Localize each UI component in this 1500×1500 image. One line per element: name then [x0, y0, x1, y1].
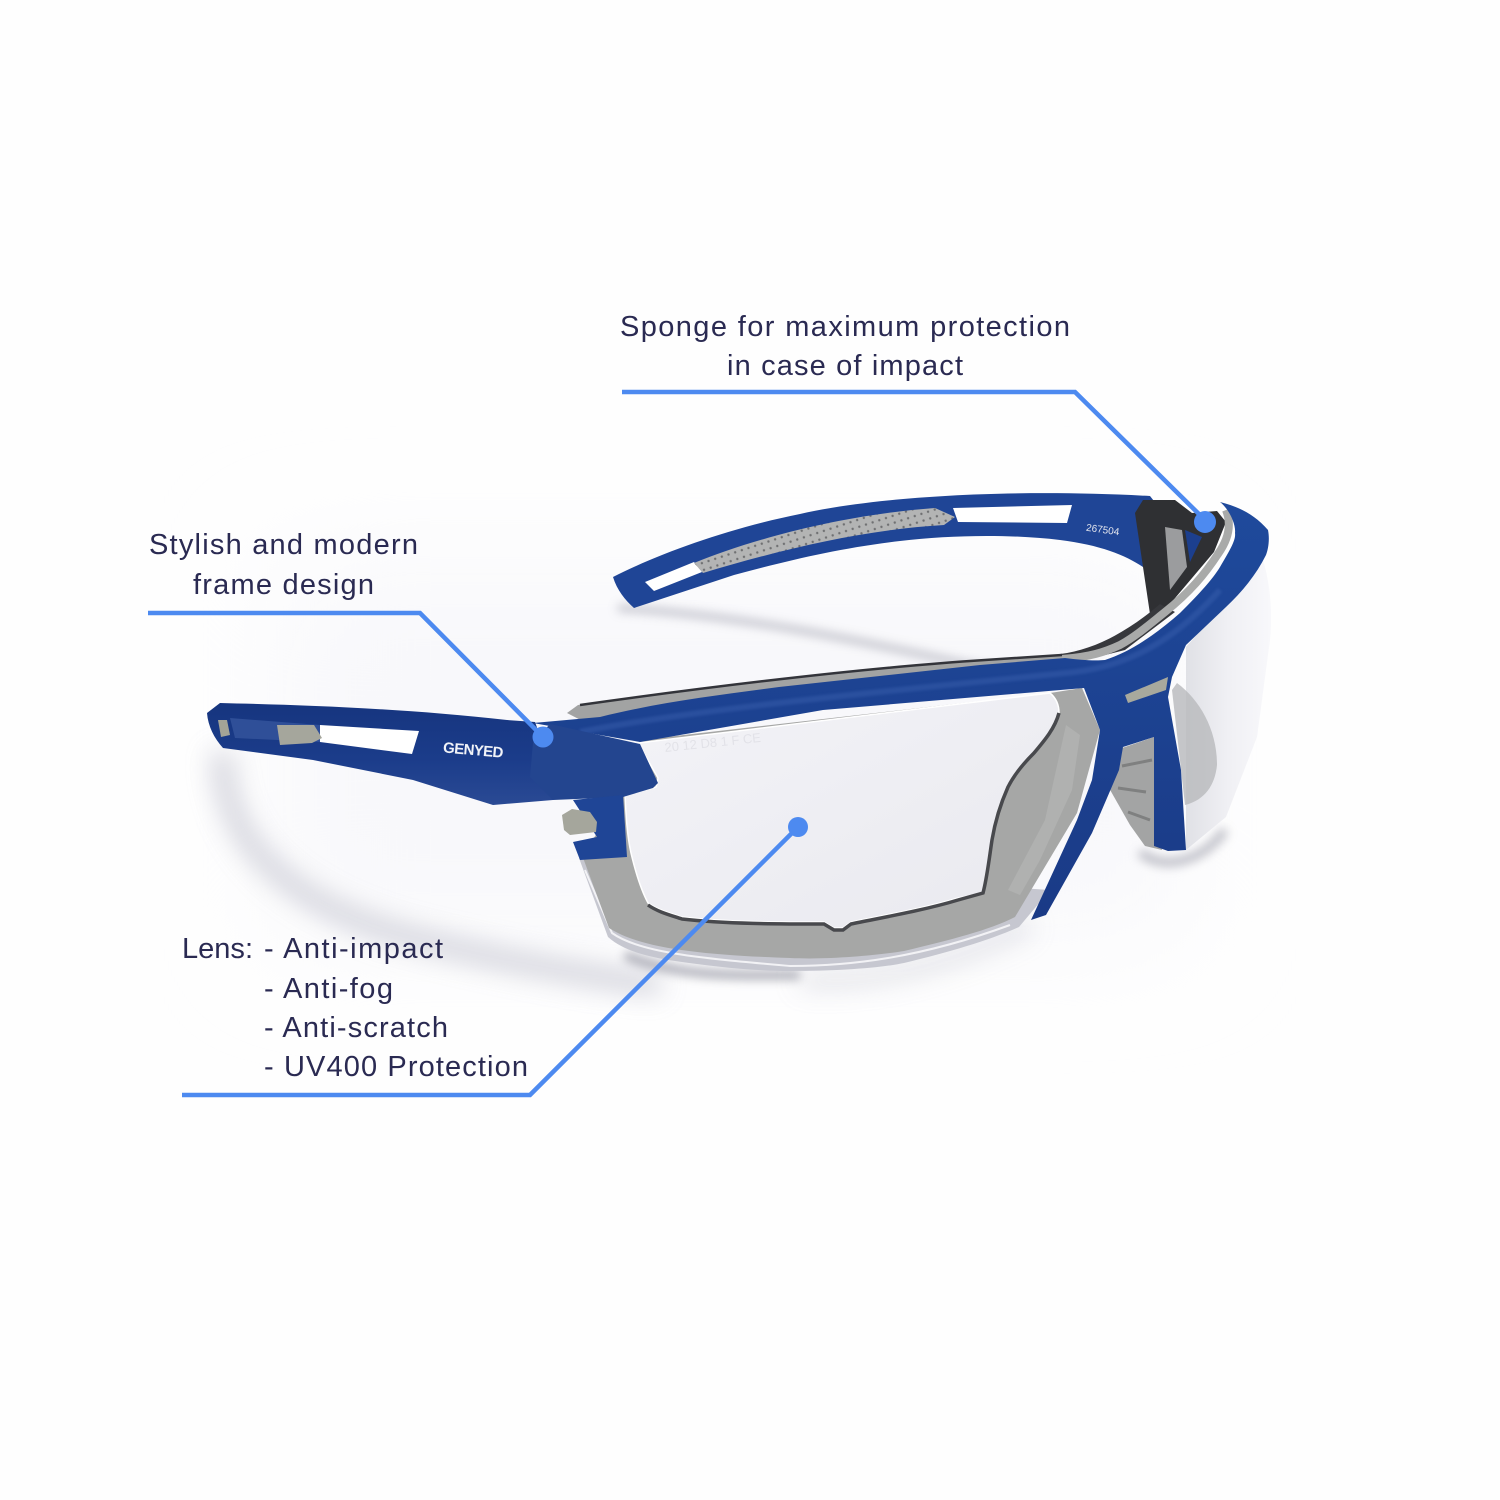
far temple model number: 267504 — [1085, 523, 1120, 538]
temple inner panel — [230, 718, 320, 742]
callout: frame design: Stylish and modern — [149, 529, 418, 561]
callout: lens: - UV400 Protection — [264, 1051, 528, 1083]
far temple arm — [613, 493, 1165, 608]
brow highlight — [580, 590, 1220, 732]
hinge grey stub — [562, 809, 597, 835]
clear outer lens rim — [579, 858, 1050, 971]
sponge inside the frame — [1060, 500, 1226, 664]
lens etched marking: 20 12 D8 1 F CE — [664, 730, 762, 755]
callout: sponge: Sponge for maximum protection — [620, 311, 1070, 343]
callout: lens: Lens: — [182, 933, 253, 965]
callout: frame design — [148, 529, 554, 748]
nose pad — [1109, 737, 1162, 850]
frame side slot — [1125, 677, 1168, 703]
grey top band — [567, 655, 1100, 730]
soft background glow — [280, 570, 1180, 930]
far lens — [1186, 560, 1271, 850]
far temple tip window — [645, 562, 702, 591]
far lens gasket — [1172, 683, 1217, 805]
sponge grey rib — [1165, 527, 1187, 590]
callout: lens: - Anti-fog — [264, 973, 393, 1005]
brand logo: GENYED — [442, 739, 504, 762]
front gasket — [582, 688, 1100, 958]
far temple mesh insert — [694, 508, 955, 573]
callout: sponge — [620, 311, 1216, 533]
dark sponge line on the brow — [580, 655, 1062, 705]
blue showing through the sponge — [1185, 530, 1202, 562]
hinge block — [530, 724, 658, 800]
gasket lighter inner strip — [1008, 725, 1080, 895]
hinge post — [573, 795, 627, 860]
lens inner dark seal — [648, 713, 1059, 930]
callout: frame design: frame design — [193, 569, 374, 601]
callout: lens — [182, 817, 808, 1095]
front frame — [533, 502, 1269, 920]
near temple window — [320, 725, 419, 754]
grey band along the frame corner — [1062, 510, 1229, 659]
rim highlight — [585, 870, 1010, 966]
front lens — [625, 693, 1059, 928]
callout: lens: - Anti-impact — [264, 933, 443, 965]
near temple grey block — [277, 725, 322, 745]
callout: lens: - Anti-scratch — [264, 1012, 448, 1044]
shadows under the glasses — [222, 608, 1225, 985]
temple tip grey block — [218, 720, 230, 737]
near temple arm — [207, 703, 560, 805]
callout: sponge: in case of impact — [727, 350, 963, 382]
far temple window — [953, 505, 1072, 523]
